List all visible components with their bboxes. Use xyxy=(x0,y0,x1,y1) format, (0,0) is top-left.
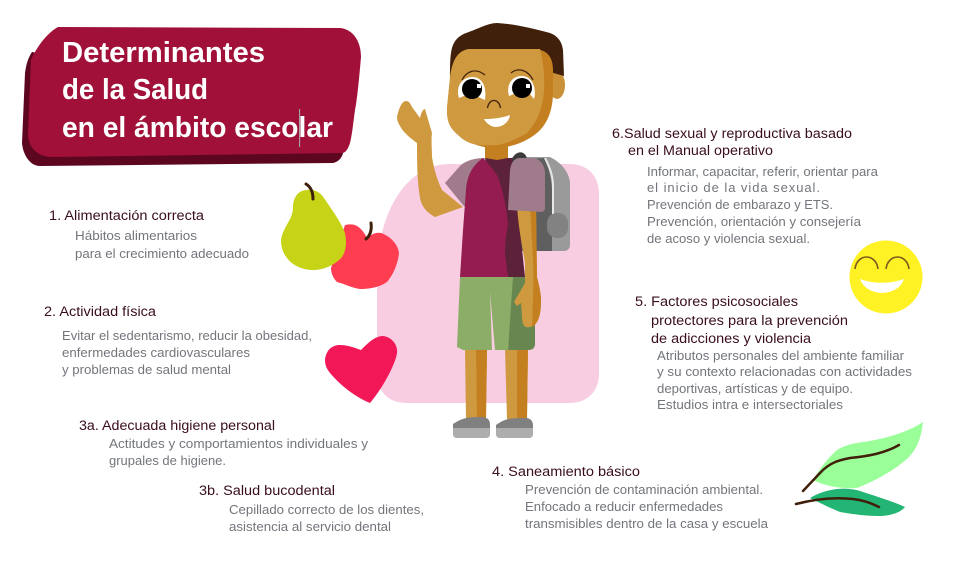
text block: 1. Alimentación correcta: para el crecimiento adecuado xyxy=(75,246,249,261)
icon: heart xyxy=(325,336,397,403)
text block: 1. Alimentación correcta: 1. Alimentación correcta xyxy=(49,208,205,223)
title text: Determinantes xyxy=(62,37,265,69)
text block: 6. Salud sexual y reproductiva: Prevención de embarazo y ETS. xyxy=(647,197,833,212)
legs xyxy=(465,348,528,419)
text block: 5. Factores psicosociales: Estudios intra e intersectoriales xyxy=(657,397,843,412)
icon: smiling face xyxy=(850,240,922,314)
text block: 5. Factores psicosociales: protectores para la prevención xyxy=(651,313,848,328)
text block: 4. Saneamiento básico: Enfocado a reducir enfermedades xyxy=(525,499,723,514)
shorts xyxy=(457,277,535,350)
neck xyxy=(485,144,508,160)
title text: en el ámbito escolar xyxy=(62,112,333,144)
text block: 6. Salud sexual y reproductiva xyxy=(612,126,879,246)
left sleeve xyxy=(445,158,485,212)
text block: 6. Salud sexual y reproductiva: 6.Salud sexual y reproductiva basado xyxy=(612,126,852,141)
text block: 1. Alimentación correcta xyxy=(49,208,249,261)
hair xyxy=(450,23,564,80)
eyes xyxy=(458,70,535,100)
text block: 3b. Salud bucodental: Cepillado correcto de los dientes, xyxy=(229,502,424,517)
text block: 5. Factores psicosociales: 5. Factores psicosociales xyxy=(635,294,798,309)
face xyxy=(447,49,553,148)
text block: 6. Salud sexual y reproductiva: de acoso y violencia sexual. xyxy=(647,231,810,246)
text block: 5. Factores psicosociales: y su contexto relacionadas con actividades xyxy=(657,364,913,379)
text block: 2. Actividad física: y problemas de salud mental xyxy=(62,362,231,377)
text block: 5. Factores psicosociales: de adicciones y violencia xyxy=(651,331,812,346)
text block: 6. Salud sexual y reproductiva: Prevención, orientación y consejería xyxy=(647,214,862,229)
text block: 3a. Adecuada higiene personal xyxy=(79,418,369,468)
ear xyxy=(549,71,565,99)
text block: 4. Saneamiento básico: 4. Saneamiento básico xyxy=(492,464,640,479)
text block: 2. Actividad física xyxy=(44,304,312,377)
text block: 6. Salud sexual y reproductiva: en el Manual operativo xyxy=(628,143,773,158)
illustration: boy with backpack xyxy=(397,23,570,438)
text block: 2. Actividad física: enfermedades cardiovasculares xyxy=(62,345,250,360)
backpack xyxy=(503,152,570,251)
text block: 3b. Salud bucodental: 3b. Salud bucodental xyxy=(199,483,335,498)
text block: 3a. Adecuada higiene personal: grupales de higiene. xyxy=(109,453,226,468)
title text xyxy=(62,37,333,147)
text block: 6. Salud sexual y reproductiva: Informar, capacitar, referir, orientar para xyxy=(647,164,879,179)
text block: 4. Saneamiento básico: Prevención de contaminación ambiental. xyxy=(525,482,763,497)
text block: 4. Saneamiento básico xyxy=(492,464,769,531)
text block: 3b. Salud bucodental: asistencia al servicio dental xyxy=(229,519,391,534)
shirt xyxy=(460,158,525,277)
text block: 3a. Adecuada higiene personal: Actitudes y comportamientos individuales y xyxy=(109,436,369,451)
text block: 3b. Salud bucodental xyxy=(199,483,424,534)
title banner xyxy=(22,27,361,166)
icon: apple xyxy=(331,223,399,289)
waving arm xyxy=(397,101,463,217)
mouth xyxy=(484,115,510,127)
text block: 3a. Adecuada higiene personal: 3a. Adecuada higiene personal xyxy=(79,418,275,433)
nose xyxy=(488,100,500,108)
text block: 6. Salud sexual y reproductiva: el inicio de la vida sexual. xyxy=(647,180,820,195)
text block: 1. Alimentación correcta: Hábitos alimentarios xyxy=(75,228,198,243)
text block: 2. Actividad física: 2. Actividad física xyxy=(44,304,157,319)
shoes xyxy=(453,417,533,438)
title text: de la Salud xyxy=(62,74,208,106)
text block: 5. Factores psicosociales: Atributos personales del ambiente familiar xyxy=(657,348,905,363)
pink background panel xyxy=(377,164,599,403)
text block: 5. Factores psicosociales: deportivas, artísticas y de equipo. xyxy=(657,381,853,396)
right sleeve xyxy=(508,158,545,212)
text block: 4. Saneamiento básico: transmisibles dentro de la casa y escuela xyxy=(525,516,769,531)
icon: pear xyxy=(281,184,346,270)
icon: leaves xyxy=(796,422,923,516)
right arm xyxy=(514,205,541,327)
text block: 2. Actividad física: Evitar el sedentarismo, reducir la obesidad, xyxy=(62,328,312,343)
text block: 5. Factores psicosociales xyxy=(635,294,913,412)
